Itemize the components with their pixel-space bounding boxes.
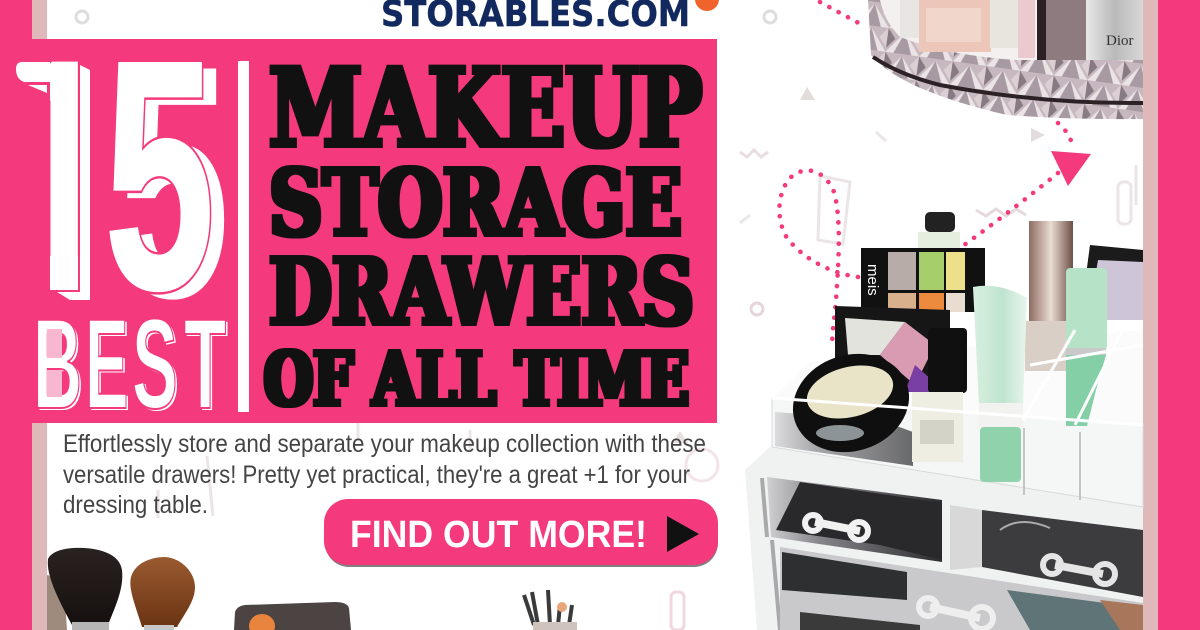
word BEST: S xyxy=(134,294,180,437)
drawer body xyxy=(745,445,1143,630)
title banner xyxy=(16,39,717,423)
compact reflection on tray xyxy=(775,412,913,466)
drawer handle xyxy=(1043,556,1115,584)
dotted arrow path xyxy=(779,2,1091,345)
black bottle xyxy=(928,328,967,393)
big number 15: 5 xyxy=(104,0,215,358)
description text: dressing table. xyxy=(63,491,208,519)
tray xyxy=(772,330,1143,425)
round compact xyxy=(780,339,922,467)
heading: Makeup Storage Drawers of All Time: MAKEUP xyxy=(269,44,702,172)
right pink border xyxy=(1143,0,1200,630)
icon: play arrow xyxy=(667,516,699,552)
description text: versatile drawers! Pretty yet practical, they're a great +1 for your xyxy=(63,461,690,489)
numeral 1 flag xyxy=(16,62,50,82)
word BEST xyxy=(33,292,228,438)
heading: Makeup Storage Drawers of All Time: OF ALL TIME xyxy=(264,337,689,423)
top drawer right xyxy=(982,510,1143,597)
word BEST: B xyxy=(35,294,84,437)
hatched fill inside B xyxy=(47,329,62,397)
word BEST: E xyxy=(87,294,131,438)
rotating crystal organiser xyxy=(868,0,1143,119)
foundation bottle xyxy=(912,392,963,462)
gold cap xyxy=(1029,221,1073,321)
drawer handle xyxy=(919,598,993,629)
button: find out more: FIND OUT MORE! xyxy=(350,514,647,556)
left pink border xyxy=(0,0,47,630)
heading: Makeup Storage Drawers of All Time: DRAWERS xyxy=(269,238,694,346)
numeral 1 shadow xyxy=(57,65,90,300)
arrowhead xyxy=(1051,151,1091,186)
heading: Makeup Storage Drawers of All Time xyxy=(264,44,702,423)
makeup brushes xyxy=(47,548,195,630)
mint lipstick right xyxy=(1066,268,1107,426)
perfume bottles: Dior xyxy=(1106,33,1134,49)
compact with sponge xyxy=(234,602,351,630)
numeral 1: 1 xyxy=(4,0,115,362)
lower eyeshadow palette xyxy=(835,306,950,392)
drawer handle xyxy=(805,515,868,540)
meis eyeshadow palette xyxy=(861,248,985,312)
big number 15 xyxy=(16,62,224,300)
drawer frame edge xyxy=(762,478,780,630)
mint tube left xyxy=(973,286,1027,482)
centre pillar xyxy=(950,505,982,570)
description text xyxy=(63,430,706,519)
numeral 5: 5 xyxy=(104,0,215,358)
word BEST: T xyxy=(184,292,226,435)
word BEST: B xyxy=(33,292,82,435)
word BEST: S xyxy=(132,292,178,435)
numeral 5 shadow: 5 xyxy=(118,0,229,365)
lower drawer xyxy=(780,547,1143,630)
button: find out more xyxy=(324,499,718,567)
acrylic drawer unit xyxy=(745,212,1143,630)
top drawer left xyxy=(767,477,942,562)
tray dividers xyxy=(772,325,1143,500)
back right palette xyxy=(1080,245,1143,320)
description text: Effortlessly store and separate your makeup collection with these xyxy=(63,430,706,458)
bottle with black cap xyxy=(918,212,960,252)
word BEST: E xyxy=(85,292,129,436)
perfume bottles xyxy=(900,0,1143,60)
heading: Makeup Storage Drawers of All Time: STORAGE xyxy=(269,149,682,257)
brush cup xyxy=(524,590,577,630)
vertical divider xyxy=(238,61,249,412)
meis eyeshadow palette: meis xyxy=(864,264,881,296)
word BEST: T xyxy=(186,294,228,437)
